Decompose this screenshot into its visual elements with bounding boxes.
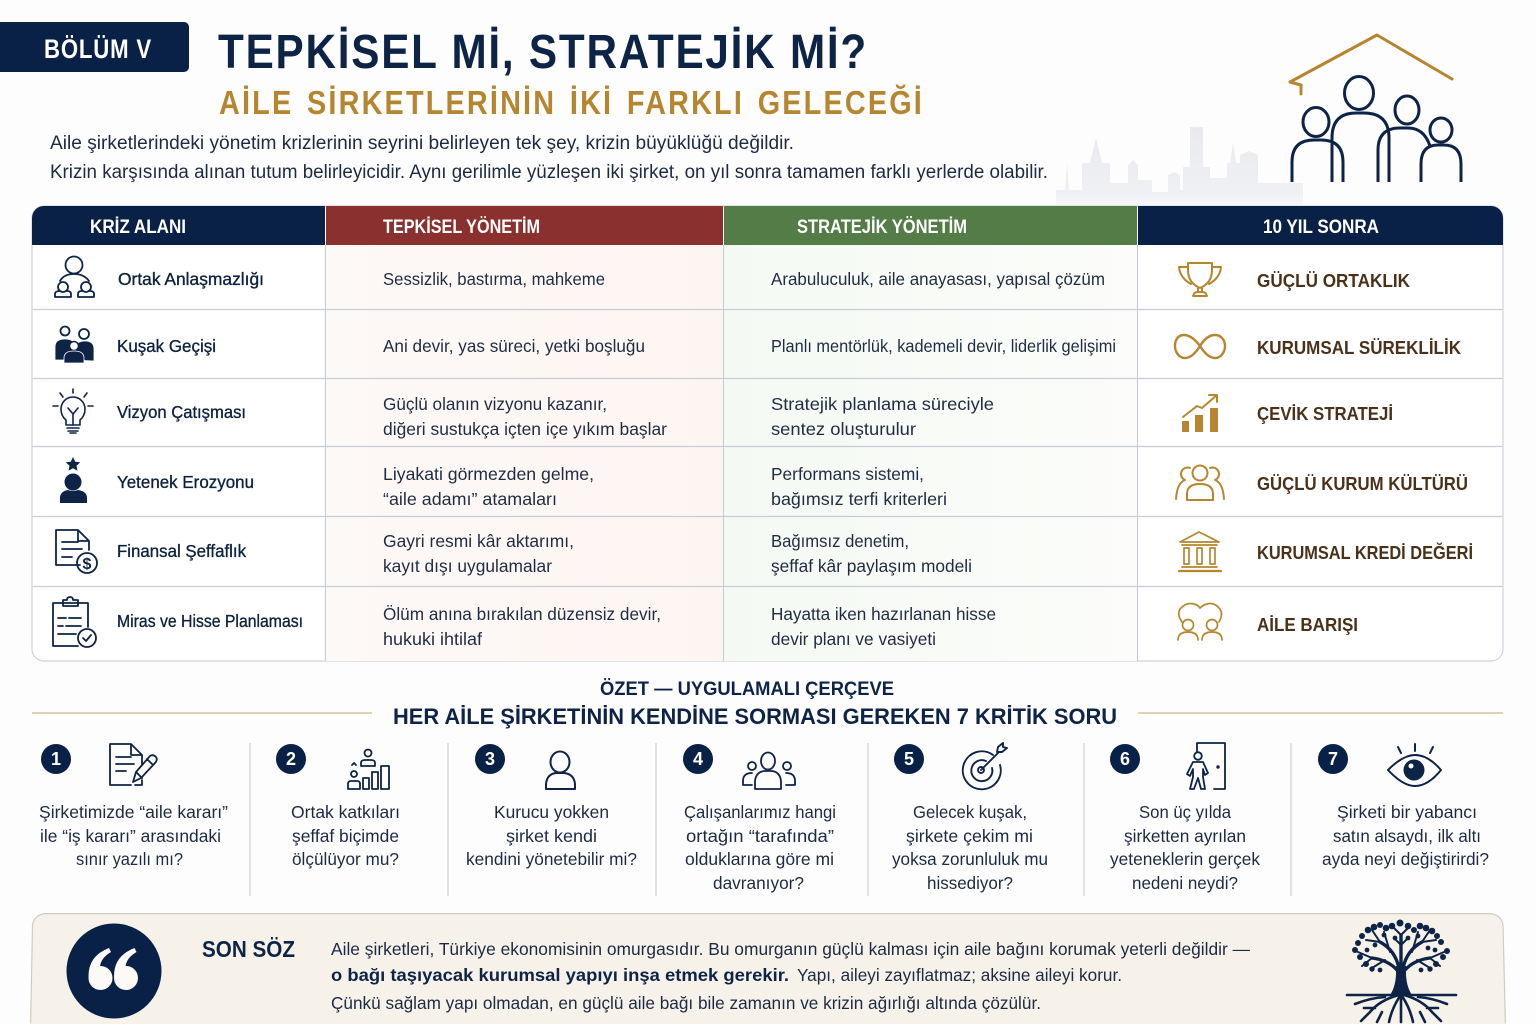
subtitle: AİLE SİRKETLERİNİN İKİ FARKLI GELECEĞİ: [219, 84, 924, 121]
section heading: özet: ÖZET — UYGULAMALI ÇERÇEVE: [600, 679, 894, 700]
question text 6: şirketten ayrılan: [1124, 826, 1246, 846]
number badge 3: 3: [485, 749, 495, 769]
question 4: [683, 744, 836, 893]
outcome: kurumsal kredi değeri: KURUMSAL KREDİ DEĞERİ: [1257, 542, 1473, 563]
question text 3: Kurucu yokken: [494, 802, 609, 822]
row label: miras ve hisse planlaması: Miras ve Hisse Planlaması: [117, 611, 303, 631]
row text: gayri resmi: kayıt dışı uygulamalar: [383, 556, 552, 576]
row text: bağımsız denetim: şeffaf kâr paylaşım modeli: [771, 556, 972, 576]
skyline illustration: [1056, 127, 1303, 205]
number badge 2: 2: [286, 749, 296, 769]
intro text: Aile şirketlerindeki yönetim krizlerinin seyrini belirleyen tek şey, krizin büyüklüğü değildir.: [50, 133, 794, 154]
question text 7: ayda neyi değiştirirdi?: [1322, 849, 1489, 869]
row text: güçlü olanın: Güçlü olanın vizyonu kazanır,: [383, 394, 607, 414]
number badge 3: [475, 744, 505, 774]
intro text: [50, 133, 1048, 183]
number badge 6: [1110, 744, 1140, 774]
icon: infinity: [1175, 335, 1225, 358]
row label: kuşak geçişi: Kuşak Geçişi: [117, 336, 216, 356]
row text: hayatta iken: Hayatta iken hazırlanan hisse: [771, 604, 996, 624]
icon: person at door: [1187, 743, 1225, 789]
row label: ortak anlaşmazlığı: Ortak Anlaşmazlığı: [118, 269, 264, 289]
icon: kuşak geçişi: [55, 326, 94, 363]
outcome: kurumsal süreklilik: KURUMSAL SÜREKLİLİK: [1257, 337, 1462, 358]
closing text: Çünkü sağlam yapı olmadan, en güçlü aile bağı bile zamanın ve krizin ağırlığı altında çözülür.: [331, 993, 1041, 1013]
question text 5: Gelecek kuşak,: [913, 802, 1027, 822]
question text 4: davranıyor?: [713, 873, 804, 893]
question 7: [1318, 744, 1489, 869]
title: TEPKİSEL Mİ, STRATEJİK Mİ?: [218, 26, 868, 79]
question text 6: yeteneklerin gerçek: [1110, 849, 1260, 869]
row text: planlı mentörlük: Planlı mentörlük, kademeli devir, liderlik gelişimi: [771, 336, 1116, 356]
icon: financial document: $: [83, 556, 92, 573]
outcome: güçlü kurum kültürü: GÜÇLÜ KURUM KÜLTÜRÜ: [1257, 473, 1468, 494]
section heading: özet: HER AİLE ŞİRKETİNİN KENDİNE SORMASI GEREKEN 7 KRİTİK SORU: [393, 704, 1117, 729]
section badge: BÖLÜM V: [44, 34, 152, 64]
question text 3: [466, 802, 637, 869]
number badge 6: 6: [1120, 749, 1130, 769]
row text: ölüm anına: hukuki ihtilaf: [383, 629, 482, 649]
icon: target: [963, 743, 1007, 789]
icon: people and bars: [348, 750, 389, 789]
question text 7: Şirketi bir yabancı: [1337, 802, 1477, 822]
icon: talent with star: [60, 457, 87, 503]
question text 7: [1322, 802, 1489, 869]
closing text: Yapı, aileyi zayıflatmaz; aksine aileyi korur.: [797, 965, 1122, 985]
icon: eye: [1388, 744, 1441, 786]
table header: kriz alanı: KRİZ ALANI: [90, 215, 186, 238]
question text 4: olduklarına göre mi: [685, 849, 834, 869]
row text: stratejik planlama: Stratejik planlama süreciyle: [771, 394, 994, 414]
number badge 5: [894, 744, 924, 774]
question text 1: ile “iş kararı” arasındaki: [40, 826, 221, 846]
table header: stratejik yönetim: [724, 206, 1137, 245]
icon: bank: [1179, 532, 1221, 571]
question 3: [466, 744, 637, 869]
question text 3: şirket kendi: [506, 826, 597, 846]
panel: comparison table: [32, 206, 1503, 661]
row text: güçlü olanın: [383, 394, 667, 439]
outcome: aile barışı: AİLE BARIŞI: [1257, 614, 1358, 635]
question text 7: satın alsaydı, ilk altı: [1333, 826, 1481, 846]
row text: hayatta iken: devir planı ve vasiyeti: [771, 629, 936, 649]
section heading: özet: [32, 679, 1503, 729]
question 6: [1110, 743, 1260, 893]
row text: performans: bağımsız terfi kriterleri: [771, 489, 947, 509]
table header: 10 yıl sonra: 10 YIL SONRA: [1263, 216, 1379, 238]
icon: financial document: [56, 530, 97, 573]
question text 1: sınır yazılı mı?: [76, 849, 183, 869]
question text 3: kendini yönetebilir mi?: [466, 849, 637, 869]
question text 1: Şirketimizde “aile kararı”: [39, 802, 228, 822]
row text: bağımsız denetim: [771, 531, 972, 576]
section badge: [0, 22, 189, 72]
question text 4: ortağın “tarafında”: [686, 826, 834, 846]
row text: ölüm anına: Ölüm anına bırakılan düzensiz devir,: [383, 604, 661, 624]
row text: liyakati: “aile adamı” atamaları: [383, 489, 557, 509]
icon: family peace heart: [1178, 604, 1222, 640]
outcome: güçlü ortaklık: GÜÇLÜ ORTAKLIK: [1257, 270, 1411, 291]
icon: growth chart: [1182, 395, 1218, 432]
question text 2: Ortak katkıları: [291, 802, 400, 822]
table header: stratejik yönetim: STRATEJİK YÖNETİM: [797, 215, 967, 238]
row text: liyakati: [383, 464, 594, 509]
number badge 4: 4: [693, 749, 703, 769]
row text: gayri resmi: [383, 531, 574, 576]
row label: vizyon çatışması: Vizyon Çatışması: [117, 402, 246, 422]
question text 6: nedeni neydi?: [1132, 873, 1238, 893]
row text: sessizlik: Sessizlik, bastırma, mahkeme: [383, 269, 605, 289]
icon: culture people: [1176, 466, 1224, 500]
row text: hayatta iken: [771, 604, 996, 649]
row text: güçlü olanın: diğeri sustukça içten içe yıkım başlar: [383, 419, 667, 439]
icon: lightbulb: [53, 389, 93, 433]
number badge 1: [41, 744, 71, 774]
row label: finansal şeffaflık: Finansal Şeffaflık: [117, 541, 246, 561]
icon: trophy: [1179, 263, 1221, 296]
question 2: [276, 744, 400, 869]
question text 4: Çalışanlarımız hangi: [684, 802, 836, 822]
row text: performans: Performans sistemi,: [771, 464, 924, 484]
question text 6: [1110, 802, 1260, 893]
icon: quote mark: [66, 924, 162, 1018]
question text 2: [291, 802, 400, 869]
row text: liyakati: Liyakati görmezden gelme,: [383, 464, 594, 484]
question text 2: şeffaf biçimde: [292, 826, 399, 846]
question text 2: ölçülüyor mu?: [292, 849, 399, 869]
question text 4: [684, 802, 836, 893]
closing text: o bağı taşıyacak kurumsal yapıyı inşa etmek gerekir.: [331, 965, 789, 985]
row label: yetenek erozyonu: Yetenek Erozyonu: [117, 472, 254, 492]
icon: family under roof: [1290, 35, 1461, 182]
table header: kriz alanı: [32, 206, 325, 245]
question text 1: [39, 802, 228, 869]
question text 6: Son üç yılda: [1139, 802, 1231, 822]
icon: document and pen: [110, 744, 157, 785]
row text: arabuluculuk: Arabuluculuk, aile anayasası, yapısal çözüm: [771, 269, 1105, 289]
row text: stratejik planlama: [771, 394, 994, 439]
closing text: [331, 939, 1250, 1013]
number badge 4: [683, 744, 713, 774]
number badge 7: [1318, 744, 1348, 774]
table header: tepkisel yönetim: TEPKİSEL YÖNETİM: [383, 215, 540, 238]
question 5: [892, 743, 1048, 893]
question text 5: şirkete çekim mi: [906, 826, 1033, 846]
row text: gayri resmi: Gayri resmi kâr aktarımı,: [383, 531, 574, 551]
icon: group of people: [743, 752, 795, 789]
question text 5: hissediyor?: [927, 873, 1013, 893]
closing heading: SON SÖZ: [202, 936, 295, 962]
question text 5: [892, 802, 1048, 893]
icon: ortak anlaşmazlığı: [55, 256, 94, 297]
outcome: çevik strateji: ÇEVİK STRATEJİ: [1257, 403, 1393, 424]
row text: ani devir: Ani devir, yas süreci, yetki boşluğu: [383, 336, 645, 356]
row text: ölüm anına: [383, 604, 661, 649]
row text: bağımsız denetim: Bağımsız denetim,: [771, 531, 909, 551]
number badge 7: 7: [1328, 749, 1338, 769]
number badge 5: 5: [904, 749, 914, 769]
question 1: [39, 744, 228, 869]
table header: 10 yıl sonra: [1138, 206, 1503, 245]
icon: tree with roots: [1347, 920, 1456, 1022]
panel: son söz: [31, 914, 1505, 1024]
icon: inheritance clipboard: [53, 597, 96, 647]
number badge 1: 1: [51, 749, 61, 769]
row text: performans: [771, 464, 947, 509]
table header: tepkisel yönetim: [326, 206, 723, 245]
closing text: Aile şirketleri, Türkiye ekonomisinin omurgasıdır. Bu omurganın güçlü kalması için aile bağını korumak yeterli değildir —: [331, 939, 1250, 959]
question text 5: yoksa zorunluluk mu: [892, 849, 1048, 869]
intro text: Krizin karşısında alınan tutum belirleyicidir. Aynı gerilimle yüzleşen iki şirket, on yıl sonra tamamen farklı yerlerde olabilir.: [50, 162, 1048, 183]
row text: stratejik planlama: sentez oluşturulur: [771, 419, 916, 439]
icon: person: [546, 752, 575, 789]
